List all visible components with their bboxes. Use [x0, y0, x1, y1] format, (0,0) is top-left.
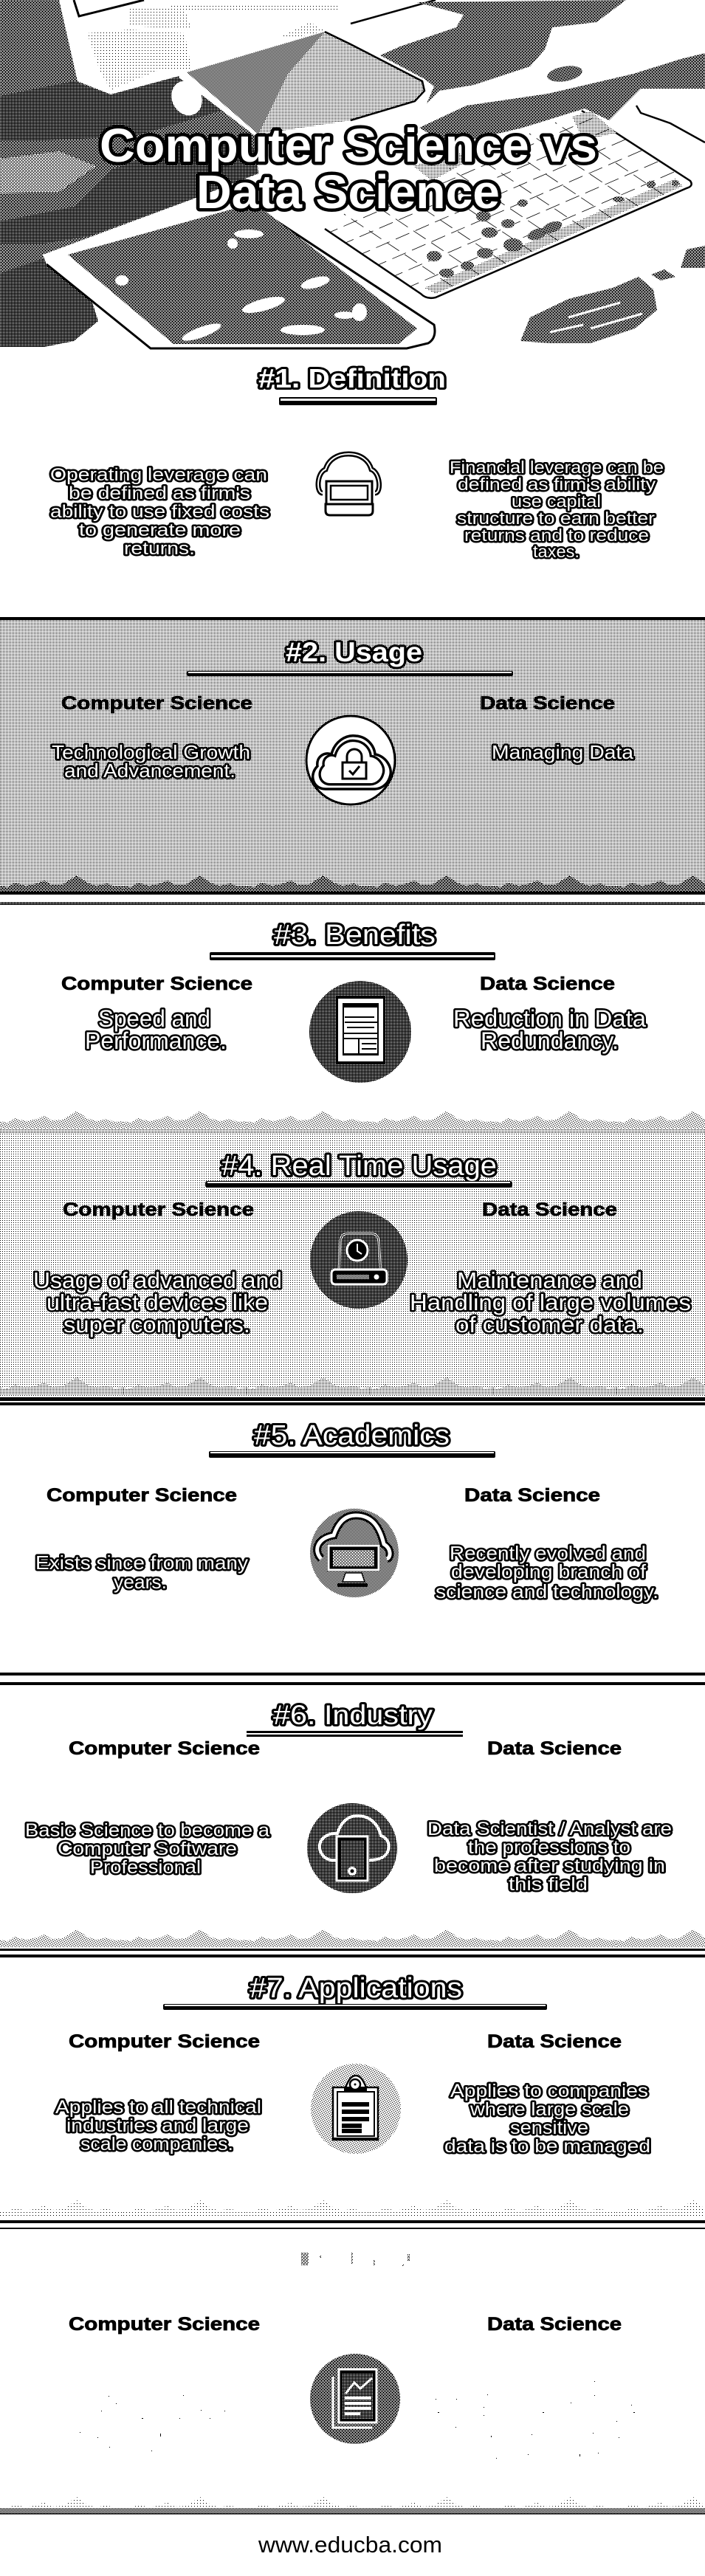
label: data science: Data Science: [482, 1199, 617, 1220]
panel: applications: [0, 1973, 705, 2218]
text: data science definition: taxes.: [533, 542, 580, 561]
label: computer science: Computer Science: [63, 1199, 254, 1220]
text: data science applications: where large scale: [470, 2099, 629, 2120]
tablet frame: [43, 193, 436, 348]
text: computer science usage: [52, 741, 250, 782]
double rule: [0, 1949, 705, 1957]
icon: storage drive clock: [310, 1211, 407, 1309]
keyboard: [318, 111, 690, 297]
label: data science: Data Science: [480, 693, 615, 714]
label: data science: Data Science: [480, 974, 615, 994]
icon: cloud lock: [306, 716, 395, 805]
text: computer science real time usage: Usage of advanced and: [33, 1267, 282, 1293]
text: data science academics: [436, 1542, 658, 1602]
text: computer science definition: to generate more: [79, 520, 241, 540]
text: computer science usage: Technological Growth: [52, 741, 250, 763]
label: data science: Data Science: [487, 2031, 622, 2052]
text: data science definition: returns and to reduce: [464, 526, 649, 545]
text: data science real time usage: of customer data.: [455, 1312, 644, 1337]
text: computer science applications: scale companies.: [80, 2134, 233, 2155]
heading: real time usage: #4. Real Time Usage: [221, 1151, 497, 1182]
text: data science benefits: Reduction in Data: [453, 1005, 646, 1032]
text: computer science academics: [35, 1552, 248, 1593]
text: computer science definition: Operating leverage can: [50, 465, 267, 485]
heading: applications: #7. Applications: [250, 1973, 462, 2004]
text: data science industry: become after studying in: [434, 1856, 665, 1876]
text: computer science industry: [25, 1820, 269, 1878]
text: computer science academics: Exists since from many: [35, 1552, 248, 1574]
faded heading specks: [301, 2253, 410, 2266]
heading underline: [187, 671, 513, 676]
icon: cloud headset monitor outline: [318, 454, 379, 515]
text: computer science usage: and Advancement.: [64, 760, 235, 782]
title: Data Science: [196, 165, 500, 218]
text: computer science industry: Professional: [90, 1857, 201, 1878]
dark desk patches right: [380, 0, 626, 103]
text: computer science real time usage: super computers.: [63, 1312, 250, 1337]
icon: document: [309, 981, 411, 1083]
text: data science applications: Applies to companies: [450, 2081, 648, 2101]
title: Computer Science vs: [100, 119, 597, 172]
label: computer science: Computer Science: [69, 1738, 260, 1759]
text: data science applications: [444, 2081, 650, 2157]
text: computer science definition: be defined as firm's: [69, 483, 250, 503]
panel background: [0, 617, 705, 895]
text: data science definition: defined as firm's ability: [458, 475, 656, 494]
heading underline: [205, 1181, 512, 1188]
mountain strip: [0, 2200, 705, 2218]
text: data science real time usage: [410, 1267, 691, 1337]
text: computer science definition: returns.: [124, 539, 195, 559]
panel: industry: [0, 1700, 705, 1947]
text: data science definition: use capital: [512, 492, 601, 511]
text: computer science definition: [50, 465, 269, 559]
label: data science: Data Science: [487, 1738, 622, 1759]
mouse cable: [636, 106, 705, 142]
text: computer science applications: [55, 2097, 261, 2155]
double rule: [0, 1673, 705, 1685]
text: computer science applications: Applies to all technical: [55, 2097, 261, 2118]
text: computer science academics: years.: [114, 1571, 167, 1593]
panel: definition: [50, 363, 664, 561]
icon: clipboard: [311, 2064, 401, 2154]
text: data science real time usage: Maintenance and: [457, 1267, 642, 1293]
double rule: [0, 2220, 705, 2229]
icon: cloud monitor: [310, 1509, 399, 1597]
double rule: [0, 902, 705, 905]
text: data science academics: science and technology.: [436, 1580, 658, 1602]
label: computer science: Computer Science: [69, 2314, 260, 2335]
mountain strip: [0, 2497, 705, 2515]
text: data science industry: [427, 1819, 672, 1895]
mountain strip: [0, 1929, 705, 1947]
text: data science industry: the professions to: [468, 1837, 630, 1858]
tablet screen: [68, 203, 417, 344]
reflection blob: [166, 76, 207, 120]
text: data science academics: Recently evolved and: [450, 1542, 646, 1564]
faded body text specks: [80, 2381, 635, 2459]
text: computer science applications: industries and large: [66, 2115, 249, 2136]
text: data science definition: structure to earn better: [457, 509, 655, 528]
hero photo: monitor, tablet and keyboard on a desk: [0, 0, 705, 348]
heading: definition: #1. Definition: [258, 363, 446, 393]
text: computer science benefits: [85, 1005, 227, 1054]
text: computer science benefits: Speed and: [98, 1005, 210, 1032]
label: data science: Data Science: [487, 2314, 622, 2335]
text: data science applications: sensitive: [510, 2118, 588, 2138]
text: data science usage: Managing Data: [492, 741, 634, 763]
text: data science academics: developing branch of: [451, 1560, 647, 1583]
icon: report chart: [310, 2354, 400, 2444]
label: computer science: Computer Science: [69, 2031, 260, 2052]
heading: usage: #2. Usage: [286, 637, 422, 667]
footer: website: www.educba.com: [258, 2532, 442, 2558]
label: data science: Data Science: [464, 1485, 600, 1506]
label: computer science: Computer Science: [47, 1485, 237, 1506]
heading underline: [247, 1731, 463, 1737]
icon: cloud phone: [307, 1803, 397, 1893]
text: data science real time usage: Handling of large volumes: [410, 1289, 691, 1315]
text: computer science industry: Basic Science to become a: [25, 1820, 269, 1841]
monitor marks: [74, 0, 144, 16]
title: [100, 119, 597, 218]
text: data science industry: Data Scientist / Analyst are: [427, 1819, 672, 1839]
panel: academics: [35, 1420, 658, 1602]
text: data science definition: [450, 458, 664, 561]
panel: real time usage: [0, 1133, 705, 1405]
text: computer science industry: Computer Software: [58, 1839, 237, 1859]
text: data science industry: this field: [509, 1874, 588, 1895]
heading: benefits: #3. Benefits: [274, 920, 436, 951]
panel: benefits: [0, 920, 705, 1133]
monitor stand slab: [187, 32, 424, 134]
label: computer science: Computer Science: [61, 974, 252, 994]
text: computer science real time usage: ultra-fast devices like: [47, 1289, 268, 1315]
heading underline: [163, 2004, 547, 2010]
text: data science definition: Financial leverage can be: [450, 458, 664, 477]
mountain strip: [0, 875, 705, 893]
panel: final comparison: [0, 2253, 705, 2515]
mountain strip: [0, 1377, 705, 1395]
heading underline: [210, 952, 495, 960]
mountain strip: [0, 1111, 705, 1129]
heading: industry: #6. Industry: [273, 1700, 433, 1730]
text: computer science definition: ability to use fixed costs: [50, 502, 269, 522]
text: computer science real time usage: [33, 1267, 282, 1337]
text: data science applications: data is to be managed: [444, 2136, 650, 2157]
text: computer science benefits: Performance.: [85, 1027, 227, 1054]
panel background: [0, 1133, 705, 1397]
heading underline: [279, 397, 437, 405]
text: data science benefits: Redundancy.: [481, 1027, 619, 1054]
label: computer science: Computer Science: [61, 693, 252, 714]
desk dark area left: [0, 0, 258, 347]
text: data science benefits: [453, 1005, 646, 1054]
panel: usage: [0, 617, 705, 895]
heading: academics: #5. Academics: [254, 1420, 450, 1451]
heading underline: [209, 1451, 495, 1458]
